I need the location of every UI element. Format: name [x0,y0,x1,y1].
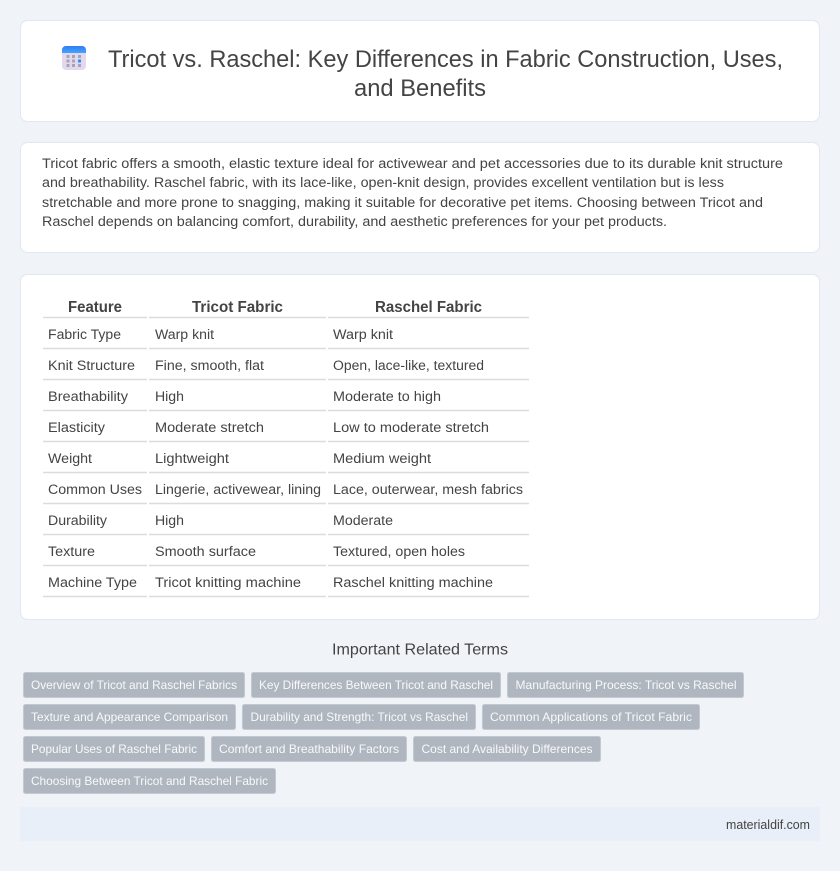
text block: summary paragraph [42,156,783,230]
tag [24,736,204,762]
footer [20,807,820,841]
tag [252,672,500,698]
tag [414,736,600,762]
tag: Key Differences Between Tricot and Raschel [259,678,493,692]
table row: Machine Type: Raschel knitting machine [333,575,493,591]
table row: Texture: Texture [48,544,95,560]
table row: Fabric Type: Warp knit [155,327,214,343]
table row: Common Uses: Common Uses [48,482,142,498]
table row: Elasticity: Low to moderate stretch [333,420,489,436]
table header row [68,299,482,316]
table row: Breathability: High [155,389,184,405]
tag [24,768,276,794]
table row: Texture [48,544,465,560]
tag: Choosing Between Tricot and Raschel Fabric [31,774,268,788]
tag: Manufacturing Process: Tricot vs Raschel [516,678,736,692]
panel: title header [20,20,820,122]
table row: Durability: Moderate [333,513,393,529]
table row: Fabric Type: Warp knit [333,327,393,343]
panel: introduction text [20,142,820,252]
table row: Fabric Type: Fabric Type [48,327,121,343]
table row: Weight: Weight [48,451,92,467]
table row: Weight: Lightweight [155,451,229,467]
tag [508,672,744,698]
table row: Knit Structure: Knit Structure [48,358,135,374]
tag [212,736,406,762]
table header row: Tricot Fabric [192,299,283,316]
tag: Overview of Tricot and Raschel Fabrics [31,678,237,692]
tag: Cost and Availability Differences [422,742,592,756]
table row: Texture: Textured, open holes [333,544,465,560]
table row: Durability: High [155,513,184,529]
tag: Comfort and Breathability Factors [219,742,399,756]
icon: calendar [62,46,86,70]
heading: related terms: Important Related Terms [332,642,508,658]
text block: summary paragraph: Raschel depends on balancing comfort, durability, and aesthetic preferences for your pet products. [42,214,667,230]
table row: Knit Structure: Fine, smooth, flat [155,358,264,374]
table row: Elasticity [48,420,489,436]
table row: Durability: Durability [48,513,108,529]
table row: Durability [48,513,393,529]
tag: Popular Uses of Raschel Fabric [31,742,197,756]
table row: Breathability: Moderate to high [333,389,441,405]
table row: Common Uses: Lace, outerwear, mesh fabrics [333,482,523,498]
table row: Machine Type: Machine Type [48,575,137,591]
table header row: Feature [68,299,122,316]
table row: Weight: Medium weight [333,451,431,467]
title: Tricot vs. Raschel: Key Differences in Fabric Construction, Uses, [108,46,783,73]
table row: Machine Type [48,575,493,591]
text block: summary paragraph: stretchable and more prone to snagging, making it suitable for decorative pet items. Choosing between Tricot and [42,195,763,211]
tag: Common Applications of Tricot Fabric [490,710,692,724]
related term tags [24,672,744,794]
tag [482,704,700,730]
panel: comparison table [20,274,820,620]
title: and Benefits [354,75,486,102]
tag [242,704,476,730]
table row: Common Uses [48,482,523,498]
table header row: Raschel Fabric [375,299,482,316]
table row: Breathability: Breathability [48,389,129,405]
table row: Machine Type: Tricot knitting machine [155,575,301,591]
table row: Breathability [48,389,441,405]
table row: Elasticity: Elasticity [48,420,106,436]
tag [24,704,236,730]
tag: Durability and Strength: Tricot vs Raschel [250,710,468,724]
table row: Knit Structure [48,358,484,374]
table row: Knit Structure: Open, lace-like, textured [333,358,484,374]
footer: materialdif.com [726,818,810,832]
table row: Weight [48,451,431,467]
table row: Fabric Type [48,327,393,343]
title [108,46,783,102]
text block: summary paragraph: and breathability. Raschel fabric, with its lace-like, open-knit design, provides excellent ventilation but is less [42,175,724,191]
tag [24,672,244,698]
text block: summary paragraph: Tricot fabric offers a smooth, elastic texture ideal for activewear and pet accessories due to its durable knit structure [42,156,783,172]
table row: Texture: Smooth surface [155,544,256,560]
table row: Elasticity: Moderate stretch [155,420,264,436]
tag: Texture and Appearance Comparison [31,710,228,724]
table row: Common Uses: Lingerie, activewear, lining [155,482,321,498]
